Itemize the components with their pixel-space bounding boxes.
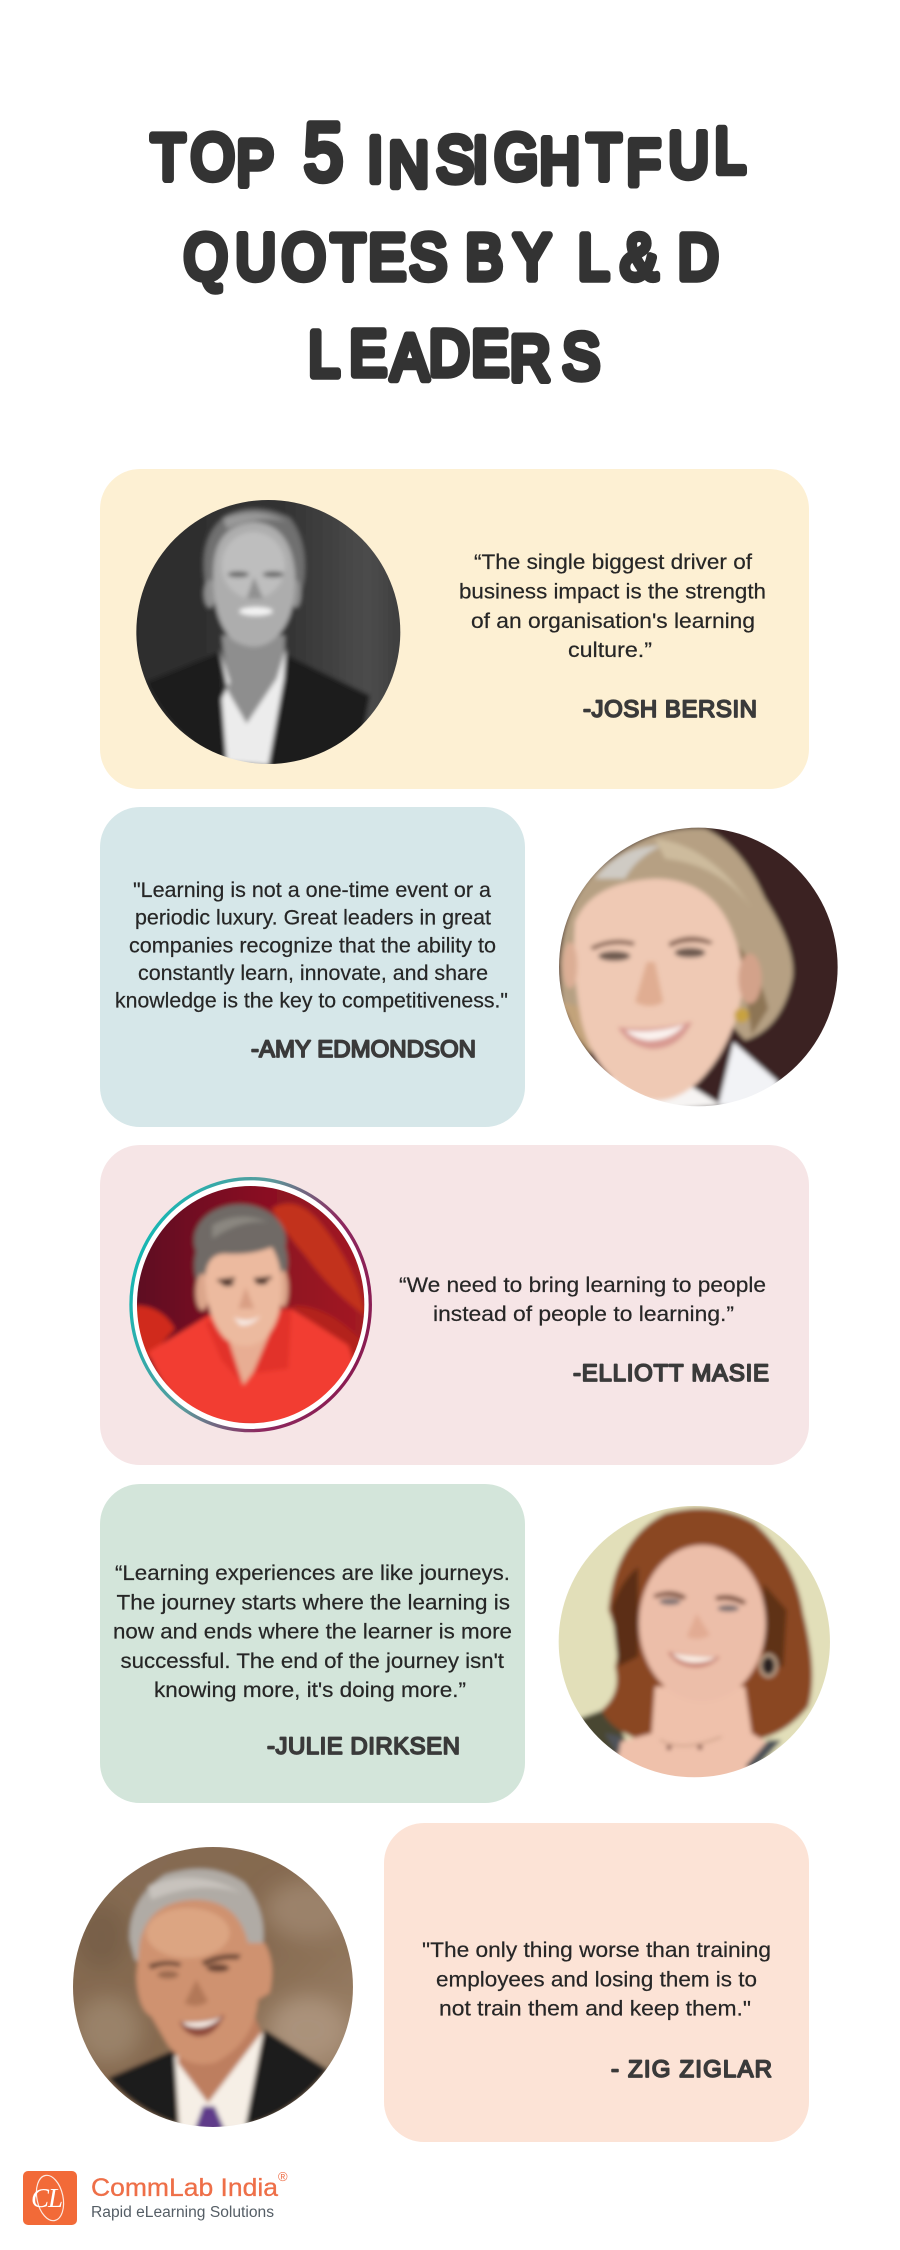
title: I (473, 123, 488, 196)
quote text: constantly learn, innovate, and share (138, 962, 488, 985)
tagline: Rapid eLearning Solutions (91, 2204, 274, 2221)
title: 5 (304, 107, 362, 196)
panel: Josh Bersin (100, 469, 809, 789)
panel: Amy Edmondson (100, 807, 525, 1127)
title: A (391, 321, 429, 393)
icon: CL mark: CL (31, 2183, 63, 2213)
title: N (389, 128, 429, 200)
quote text: now and ends where the learner is more (113, 1620, 512, 1644)
title: T (587, 120, 621, 193)
title: P (236, 126, 288, 199)
attribution: -ELLIOTT MASIE (573, 1360, 769, 1387)
quote text: "Learning is not a one-time event or a (133, 879, 491, 902)
title: H (540, 124, 580, 197)
quote text (115, 879, 508, 1012)
quote text: “Learning experiences are like journeys. (115, 1562, 510, 1585)
title: G (495, 120, 538, 193)
quote text: successful. The end of the journey isn't (120, 1650, 504, 1673)
portrait: Elliott Masie (125, 1172, 380, 1438)
quote text: “The single biggest driver of (474, 551, 752, 574)
panel: Zig Ziglar (384, 1823, 809, 2142)
quote text: companies recognize that the ability to (129, 934, 496, 958)
title (151, 107, 746, 395)
title: O (191, 120, 235, 193)
icon: CL mark (23, 2171, 77, 2225)
title: I (368, 123, 383, 196)
quote text (113, 1562, 512, 1702)
registered mark: ® (278, 2169, 288, 2184)
title: L (308, 317, 340, 390)
title: U (668, 118, 709, 191)
quote text: employees and losing them is to (436, 1968, 757, 1992)
quote text: knowing more, it's doing more.” (154, 1679, 466, 1702)
portrait: Amy Edmondson (555, 822, 845, 1115)
title: T (151, 120, 185, 193)
quote text: instead of people to learning.” (433, 1303, 734, 1326)
quote text: The journey starts where the learning is (116, 1592, 510, 1614)
quote text: culture.” (568, 639, 652, 662)
quote text: not train them and keep them." (439, 1998, 751, 2020)
title: D (429, 316, 469, 389)
attribution: -JULIE DIRKSEN (267, 1733, 460, 1760)
quote text: knowledge is the key to competitiveness." (115, 990, 508, 1012)
panel: Elliott Masie (100, 1145, 809, 1465)
brand name: CommLab India (91, 2174, 278, 2202)
panel: Julie Dirksen (100, 1484, 525, 1803)
logo: CommLab India (23, 2169, 288, 2225)
portrait: Zig Ziglar (68, 1843, 358, 2133)
quote text: "The only thing worse than training (422, 1939, 771, 1962)
title: QUOTES BY L&D (184, 220, 718, 293)
quote text (459, 551, 766, 662)
attribution: -JOSH BERSIN (583, 696, 757, 723)
quote text (422, 1939, 771, 2020)
title: S (436, 123, 474, 196)
title: E (472, 316, 509, 389)
quote text: “We need to bring learning to people (399, 1274, 766, 1297)
title: F (626, 126, 661, 199)
attribution: - ZIG ZIGLAR (611, 2056, 772, 2083)
attribution: -AMY EDMONDSON (251, 1036, 476, 1063)
title: E (350, 316, 387, 389)
quote text: business impact is the strength (459, 580, 766, 604)
portrait: Julie Dirksen (555, 1500, 835, 1782)
title: L (715, 114, 746, 186)
quote text: periodic luxury. Great leaders in great (135, 906, 491, 930)
portrait: Josh Bersin (136, 500, 400, 764)
title: R (510, 322, 550, 395)
quote text: of an organisation's learning (471, 610, 755, 633)
title: S (562, 320, 600, 392)
quote text (399, 1274, 766, 1326)
